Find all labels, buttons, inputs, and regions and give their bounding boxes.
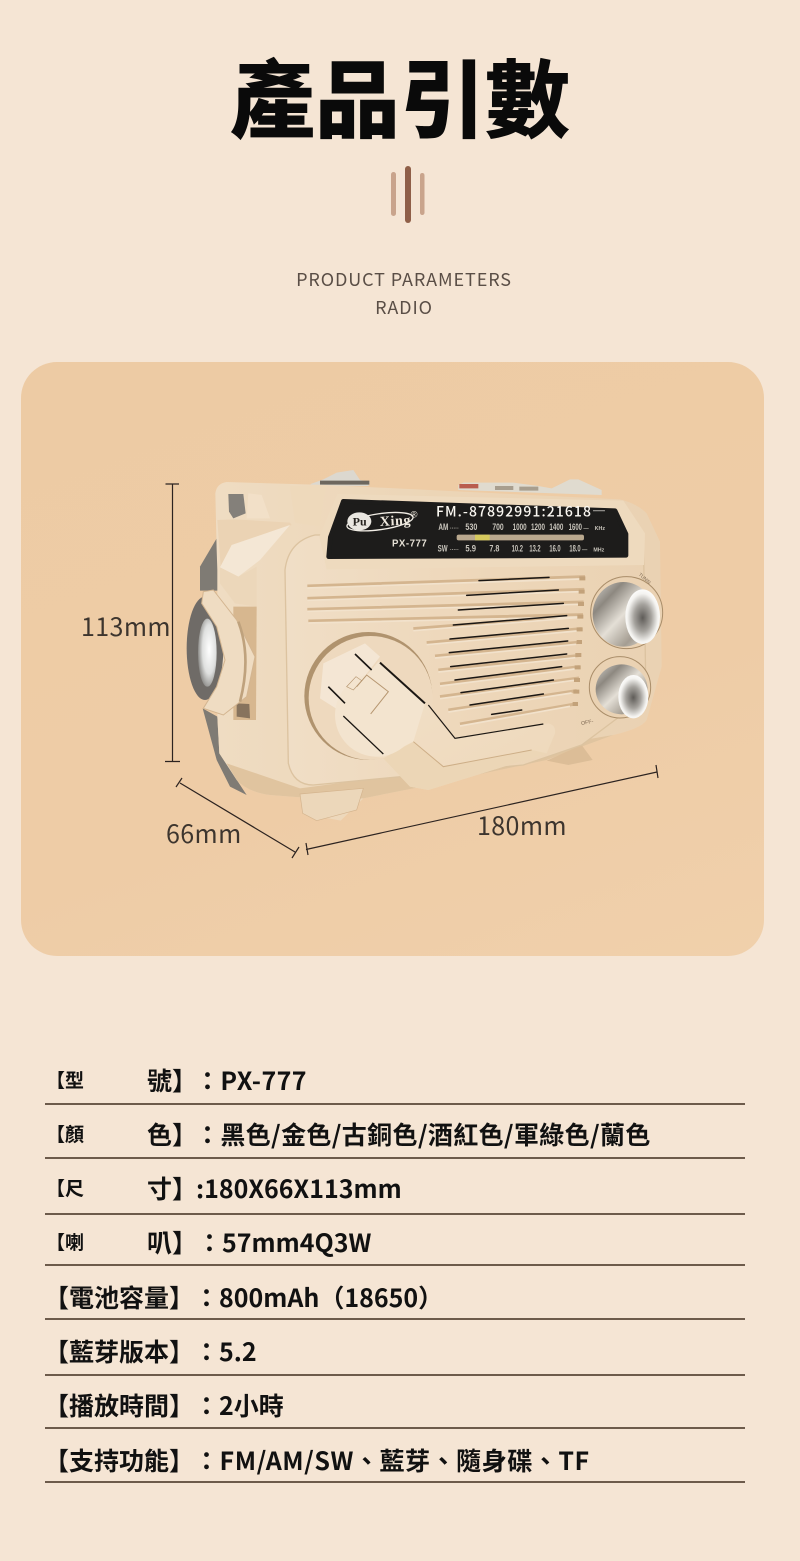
- spec row: speaker: [46, 1224, 371, 1260]
- decorative three-bar ornament icon: [391, 166, 424, 223]
- grille tabs: [573, 578, 585, 704]
- AM scale: 1000: [513, 522, 527, 532]
- grey rear housing: [200, 538, 247, 795]
- crank dark edges: [328, 654, 543, 754]
- AM scale: AM: [438, 522, 448, 532]
- subtitle: product parameters: PRODUCT PARAMETERS: [296, 266, 512, 292]
- dimension line: width 180mm: [306, 765, 658, 855]
- SW scale: —: [582, 548, 588, 554]
- spec row: bluetooth: ：5.2: [194, 1333, 257, 1369]
- spec row: size: 【尺: [46, 1174, 84, 1201]
- spec row: functions: ：FM/AM/SW、藍芽、隨身碟、TF: [194, 1442, 590, 1478]
- spec row: speaker: 叭】: [147, 1224, 197, 1260]
- spec row: size: :180X66X113mm: [196, 1170, 402, 1206]
- model number: PX-777: [392, 539, 427, 550]
- SW scale: SW: [438, 544, 448, 554]
- SW scale: 13.2: [529, 544, 541, 554]
- radio body: [215, 482, 662, 821]
- brand logo: ®: [411, 509, 418, 519]
- crank lower disc and arm: [338, 662, 555, 790]
- dial panel bezel: [319, 494, 645, 569]
- label: 180mm: 180mm: [477, 807, 567, 843]
- top buttons: [311, 470, 602, 495]
- AM scale: 1200: [531, 522, 545, 532]
- flashlight: [187, 590, 257, 720]
- tuning knob: [591, 572, 663, 649]
- spec row: colour: 色】: [147, 1116, 197, 1152]
- AM scale: ·····: [450, 526, 459, 532]
- subtitle: radio: RADIO: [375, 294, 433, 320]
- brand logo: Xing: [379, 513, 411, 530]
- panel: product image background: [21, 362, 764, 956]
- SW scale: ·····: [450, 548, 459, 554]
- SW scale: 10.2: [512, 544, 523, 554]
- label: 113mm: 113mm: [81, 608, 171, 644]
- spec row: battery: 【電池容量】: [44, 1279, 194, 1315]
- spec row: functions: 【支持功能】: [44, 1442, 194, 1478]
- volume knob: [581, 657, 651, 727]
- volume knob: OFF-: [581, 719, 594, 727]
- body top left shoulder: [217, 486, 327, 607]
- SW scale: 5.9: [465, 544, 476, 554]
- hand crank generator: [304, 632, 555, 790]
- spec row: play time: 【播放時間】: [44, 1387, 194, 1423]
- spec row: colour: ：黑色/金色/古銅色/酒紅色/軍綠色/蘭色: [195, 1116, 651, 1152]
- spec row: battery: [44, 1279, 443, 1315]
- AM scale: KHz: [595, 526, 605, 532]
- spec row: play time: [44, 1387, 284, 1423]
- front foot: [300, 788, 363, 821]
- speaker grille ridges: [307, 577, 585, 726]
- label: 66mm: 66mm: [166, 815, 242, 851]
- radio product: [187, 470, 663, 821]
- SW scale: MHz: [593, 548, 605, 554]
- body lower shadow band: [227, 735, 613, 798]
- SW scale: 16.0: [549, 544, 561, 554]
- spec row: battery: ：800mAh（18650）: [194, 1279, 443, 1315]
- brand logo: [346, 509, 418, 534]
- tuning knob: TUNIN: [638, 572, 652, 585]
- AM scale: 1600: [569, 522, 582, 532]
- spec row: size: 寸】: [147, 1170, 197, 1206]
- tuning dial panel: [329, 501, 626, 557]
- spec row: speaker: 【喇: [46, 1228, 84, 1255]
- spec row: model: 【型: [46, 1066, 84, 1093]
- FM scale: FM.-87892991:21618—: [436, 502, 606, 522]
- spec row: speaker: ：57mm4Q3W: [197, 1224, 371, 1260]
- AM scale: 530: [465, 522, 477, 532]
- brand logo: Pu: [353, 515, 367, 529]
- spec row: model: [46, 1062, 307, 1098]
- rear foot: [547, 745, 593, 765]
- front face recess: [285, 535, 646, 785]
- speaker slots: [449, 577, 568, 714]
- slider track: [457, 535, 584, 540]
- spec row: colour: 【顏: [46, 1120, 84, 1147]
- spec row: model: 號】: [147, 1062, 197, 1098]
- SW scale: 7.8: [489, 544, 499, 554]
- AM scale: 700: [492, 522, 504, 532]
- radio illustration with dimension lines: [165, 470, 664, 858]
- SW scale: 18.0: [569, 544, 581, 554]
- spec row: model: ：PX-777: [195, 1062, 307, 1098]
- spec row: size: [46, 1170, 402, 1206]
- dimension line: height 113mm: [165, 484, 180, 762]
- title: 產品引數: [230, 33, 570, 156]
- dimension line: depth 66mm: [176, 778, 299, 858]
- spec row: play time: ：2小時: [194, 1387, 284, 1423]
- spec row: bluetooth: 【藍芽版本】: [44, 1333, 194, 1369]
- AM scale: 1400: [549, 522, 563, 532]
- AM scale: —: [583, 526, 589, 532]
